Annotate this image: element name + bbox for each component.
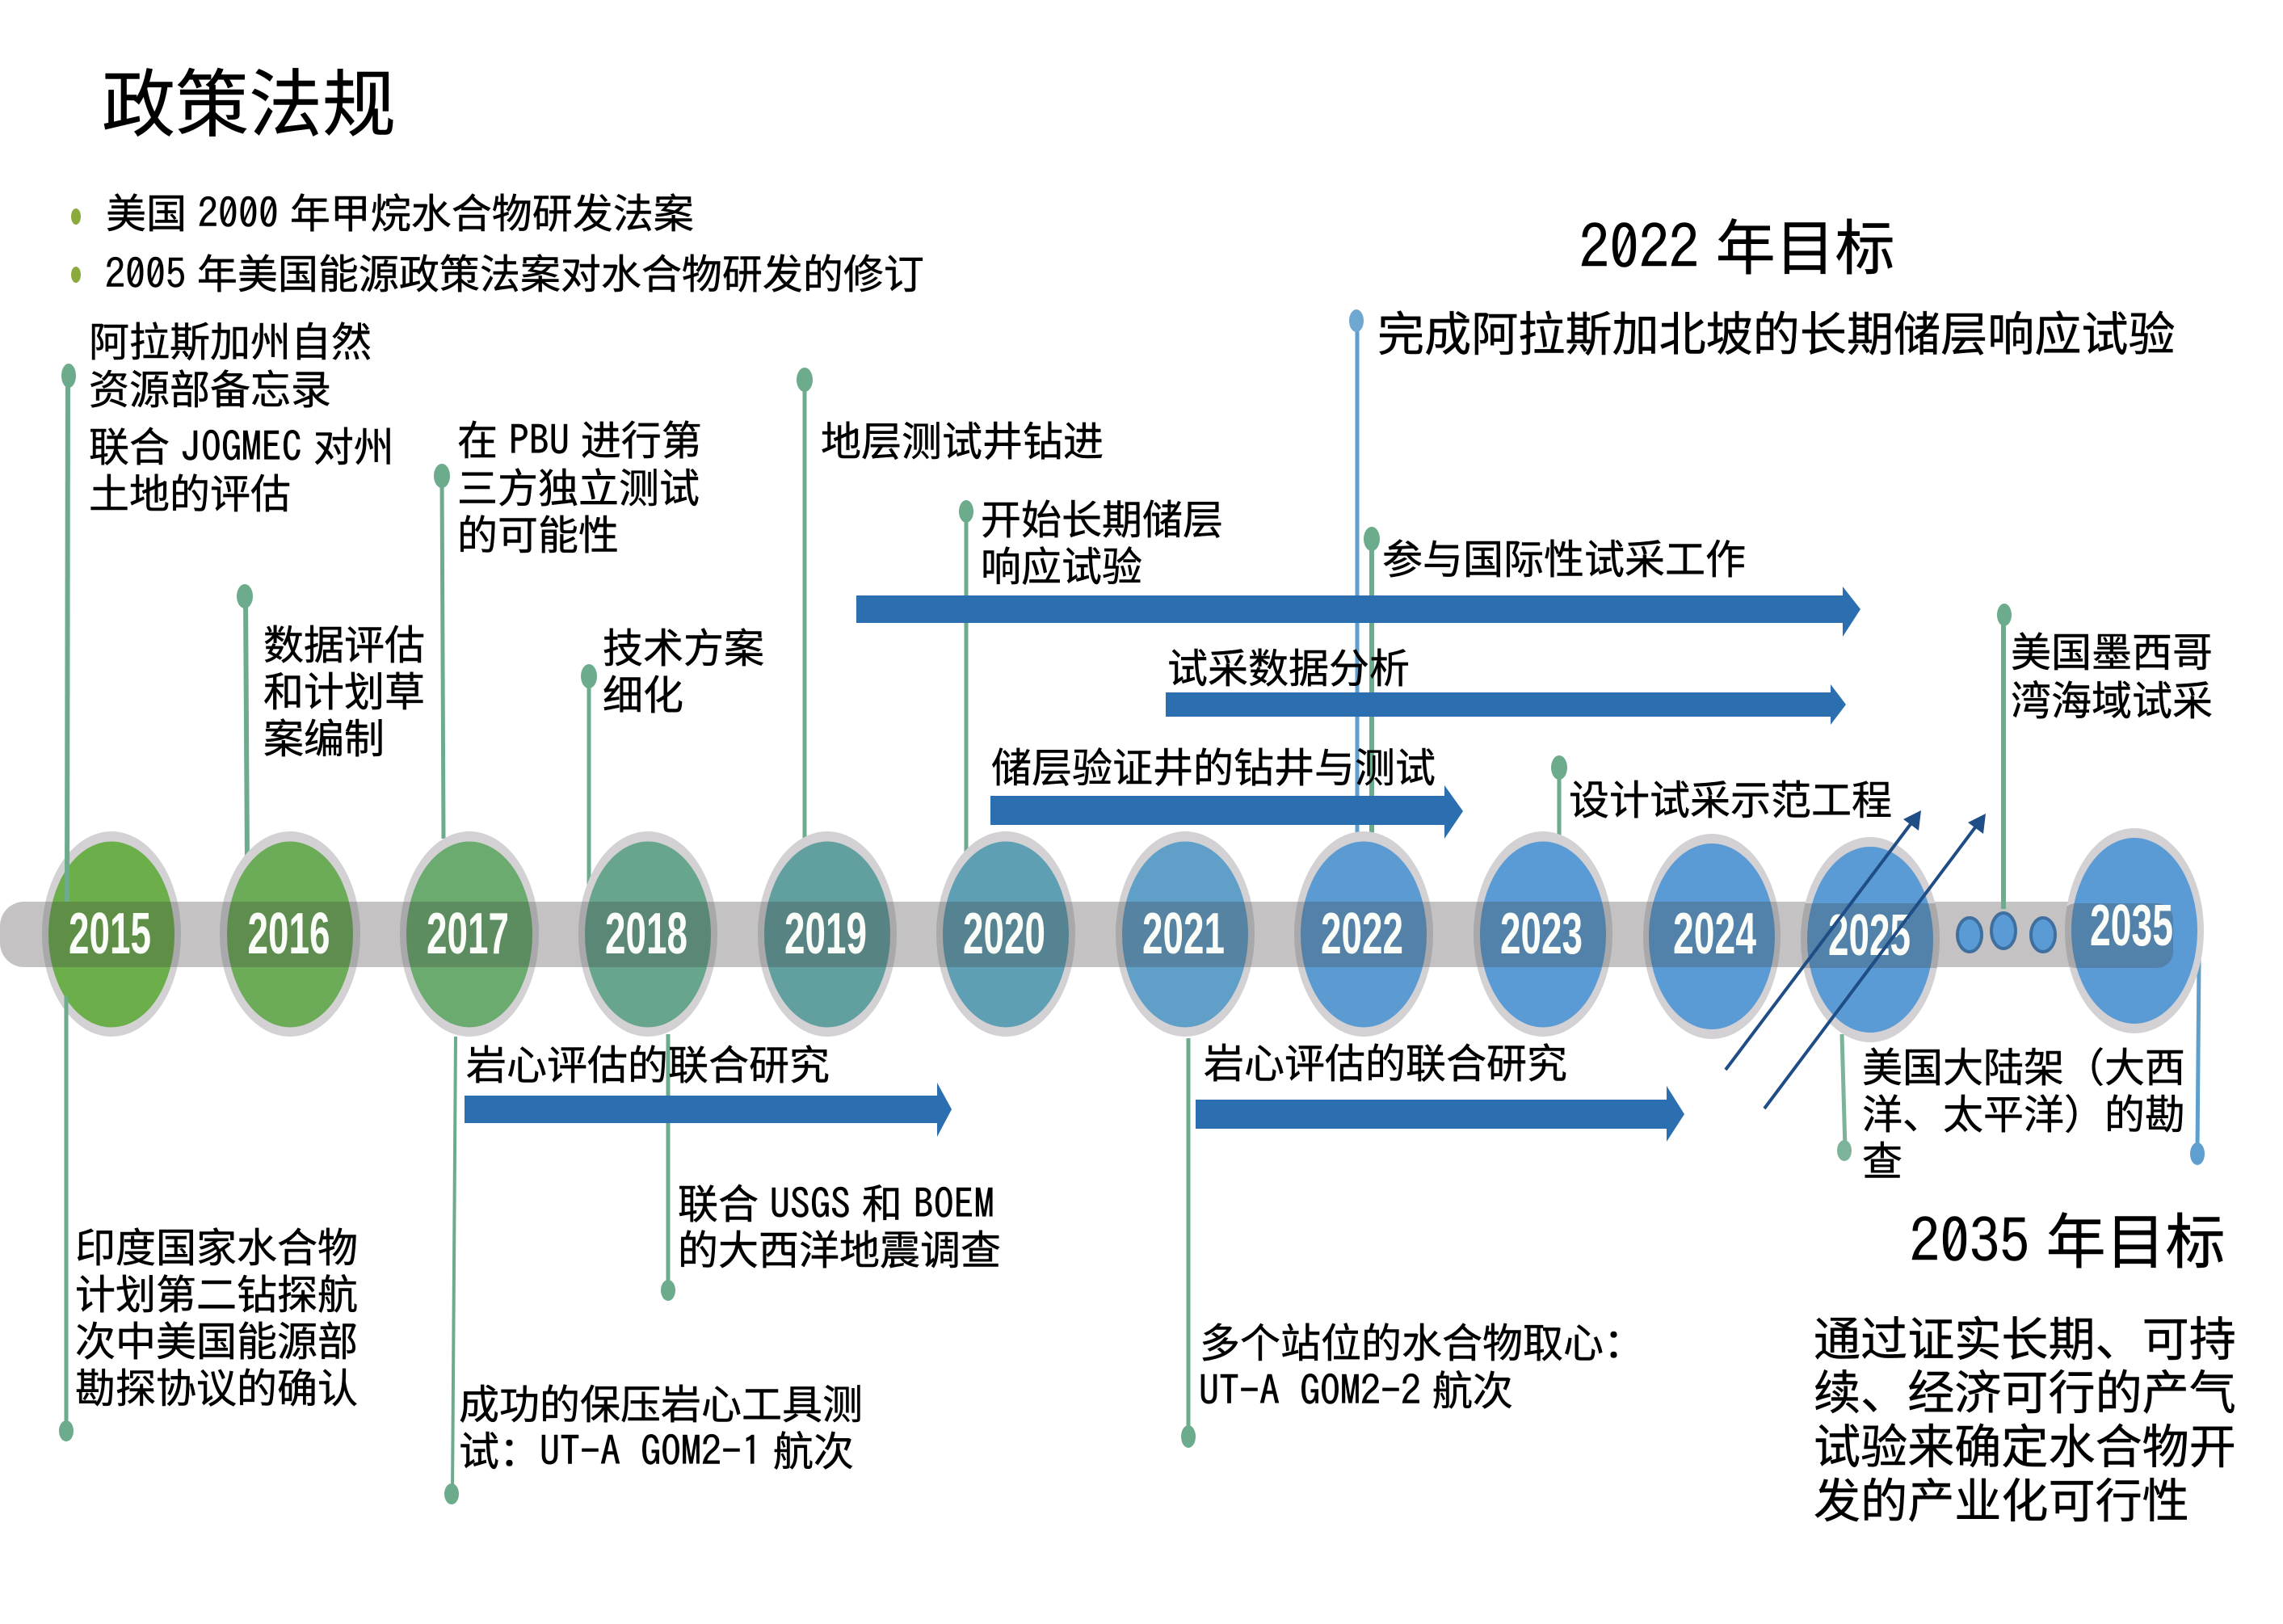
label: 2017 upper (457, 409, 702, 562)
2035 goal heading: 2035 年目标 (1910, 1194, 2226, 1281)
arrow: 试采数据分析 (1166, 684, 1846, 725)
year node 2017: 2017 (427, 902, 509, 966)
thin arrow 2 (1764, 814, 1986, 1109)
stem: 2019 (797, 368, 813, 853)
stem: 2017 lower (444, 1037, 459, 1504)
label: 2018 upper (603, 616, 764, 722)
bullets: policy list: 美国 2000 年甲烷水合物研发法案 (106, 182, 694, 240)
label: 2025 lower (1862, 1036, 2185, 1188)
label: 2015 upper: 资源部备忘录 (89, 358, 331, 416)
label: 2017 lower (459, 1373, 863, 1478)
label: 2017 lower: 试：UT-A GOM2-1 航次 (459, 1420, 854, 1478)
stem: 2021 lower (1181, 1038, 1196, 1448)
year node 2035: 2035 (2090, 894, 2173, 958)
label: 2017 lower: 成功的保压岩心工具测 (459, 1373, 863, 1431)
year node 2025 (1797, 837, 1943, 1042)
label: Gulf of Mexico: 湾海域试采 (2011, 669, 2213, 727)
label: 2017 upper: 在 PBU 进行第 (457, 409, 702, 467)
year node 2021: 2021 (1142, 902, 1225, 966)
label: 2023: 设计试采示范工程 (1569, 768, 1892, 827)
label: 2016: 和计划草 (263, 660, 425, 718)
stem: 2015 upper (61, 364, 76, 902)
year node 2024 (1640, 834, 1785, 1039)
year node 2023 (1470, 831, 1616, 1037)
timeline band (0, 902, 2173, 967)
label: core study 2021: 岩心评估的联合研究 (1204, 1032, 1567, 1090)
stem: 2017 upper (434, 464, 450, 839)
stem: 2030s Gulf of Mexico (1997, 604, 2012, 909)
year node 2018: 2018 (605, 902, 687, 966)
arrow: 参与国际性试采工作 (856, 587, 1860, 637)
label: well drilling: 储层验证井的钻井与测试 (991, 736, 1436, 794)
year node 2022 (1293, 831, 1438, 1037)
stem: 2016 (237, 584, 253, 863)
year node 2015 (40, 831, 186, 1037)
bullets: policy list (71, 182, 924, 301)
label: 2021 lower (1199, 1311, 1644, 1417)
label: 2015 lower (75, 1216, 358, 1415)
2035 goal text (1814, 1302, 2236, 1531)
label: 2022 trial: 参与国际性试采工作 (1382, 528, 1746, 586)
year node 2024: 2024 (1673, 902, 1756, 966)
arrow: 岩心评估 2021 (1196, 1086, 1684, 1142)
stem: 2022 target (1349, 309, 1364, 836)
stem: 2018 upper (581, 664, 597, 885)
label: 2015 lower: 次中美国能源部 (75, 1310, 358, 1368)
2035 goal text: 发的产业化可行性 (1814, 1463, 2189, 1531)
thin arrow 1 (1726, 810, 1921, 1070)
2035 goal text: 试验来确定水合物开 (1814, 1409, 2236, 1477)
label: 2021 lower: UT-A GOM2-2 航次 (1199, 1359, 1513, 1417)
label: 2025 lower: 美国大陆架（大西 (1862, 1036, 2185, 1094)
arrow: 岩心评估 2017 (465, 1083, 952, 1137)
stem: 2015 lower (59, 996, 74, 1441)
arrow: 储层验证井的钻井与测试 (990, 785, 1463, 839)
label: core study 2017: 岩心评估的联合研究 (466, 1033, 830, 1092)
label: 2021 lower: 多个站位的水合物取心： (1200, 1311, 1644, 1369)
stem: 2020 (959, 500, 973, 852)
label: 2025 lower: 洋、太平洋）的勘 (1862, 1083, 2185, 1141)
label: 2015 upper (89, 310, 394, 520)
ellipsis dots (1957, 913, 2055, 952)
stem: 2022 trial (1364, 527, 1380, 836)
stem: 2035 lower (2190, 960, 2205, 1165)
label: 2019: 地层测试井钻进 (821, 410, 1104, 468)
label: 2018 lower (678, 1172, 1001, 1277)
2022 goal text: 完成阿拉斯加北坡的长期储层响应试验 (1377, 297, 2176, 364)
label: 2015 lower: 印度国家水合物 (75, 1216, 358, 1274)
label: 2025 lower: 查 (1862, 1130, 1902, 1188)
year node 2017 (396, 831, 541, 1037)
label: 2015 upper: 联合 JOGMEC 对州 (89, 415, 394, 473)
label: 2015 upper: 土地的评估 (89, 462, 291, 520)
year node 2019 (755, 831, 901, 1037)
label: 2015 lower: 计划第二钻探航 (75, 1263, 358, 1321)
stem: 2025 lower (1837, 1034, 1852, 1161)
label: 2015 lower: 勘探协议的确认 (75, 1357, 358, 1415)
year node 2020: 2020 (963, 902, 1045, 966)
year node 2018 (574, 831, 719, 1037)
label: 2016 (263, 613, 425, 765)
label: 2018 lower: 联合 USGS 和 BOEM (678, 1172, 994, 1231)
title: 政策法规 (102, 45, 396, 152)
2035 goal text: 通过证实长期、可持 (1814, 1302, 2236, 1369)
label: data analysis: 试采数据分析 (1167, 637, 1410, 695)
year node 2020 (933, 831, 1078, 1037)
year node 2025: 2025 (1828, 903, 1911, 968)
label: 2018 upper: 技术方案 (603, 616, 764, 675)
label: 2020: 响应试验 (981, 535, 1142, 593)
year node 2016: 2016 (247, 902, 330, 966)
year node 2021 (1111, 831, 1256, 1037)
label: 2017 upper: 的可能性 (457, 503, 619, 562)
year node 2022: 2022 (1321, 902, 1403, 966)
year node 2015: 2015 (69, 902, 151, 966)
2035 goal text: 续、经济可行的产气 (1814, 1355, 2236, 1423)
label: 2018 upper: 细化 (603, 663, 683, 722)
year node 2016 (218, 831, 364, 1037)
2022 goal heading: 2022 年目标 (1579, 200, 1895, 287)
label: 2015 upper: 阿拉斯加州自然 (89, 310, 372, 368)
label: 2016: 数据评估 (263, 613, 425, 671)
stem: 2023 (1551, 755, 1567, 836)
label: 2017 upper: 三方独立测试 (457, 456, 700, 515)
label: Gulf of Mexico (2011, 621, 2213, 727)
year node 2023: 2023 (1500, 902, 1583, 966)
label: 2020: 开始长期储层 (981, 488, 1223, 546)
label: Gulf of Mexico: 美国墨西哥 (2011, 621, 2213, 679)
label: 2016: 案编制 (263, 707, 385, 765)
label: 2018 lower: 的大西洋地震调查 (678, 1218, 1001, 1277)
label: 2020 (981, 488, 1223, 593)
year node 2035 (2060, 828, 2204, 1033)
stem: 2018 lower (661, 1034, 675, 1301)
bullets: policy list: 2005 年美国能源政策法案对水合物研发的修订 (105, 242, 924, 301)
year node 2019: 2019 (784, 902, 867, 966)
